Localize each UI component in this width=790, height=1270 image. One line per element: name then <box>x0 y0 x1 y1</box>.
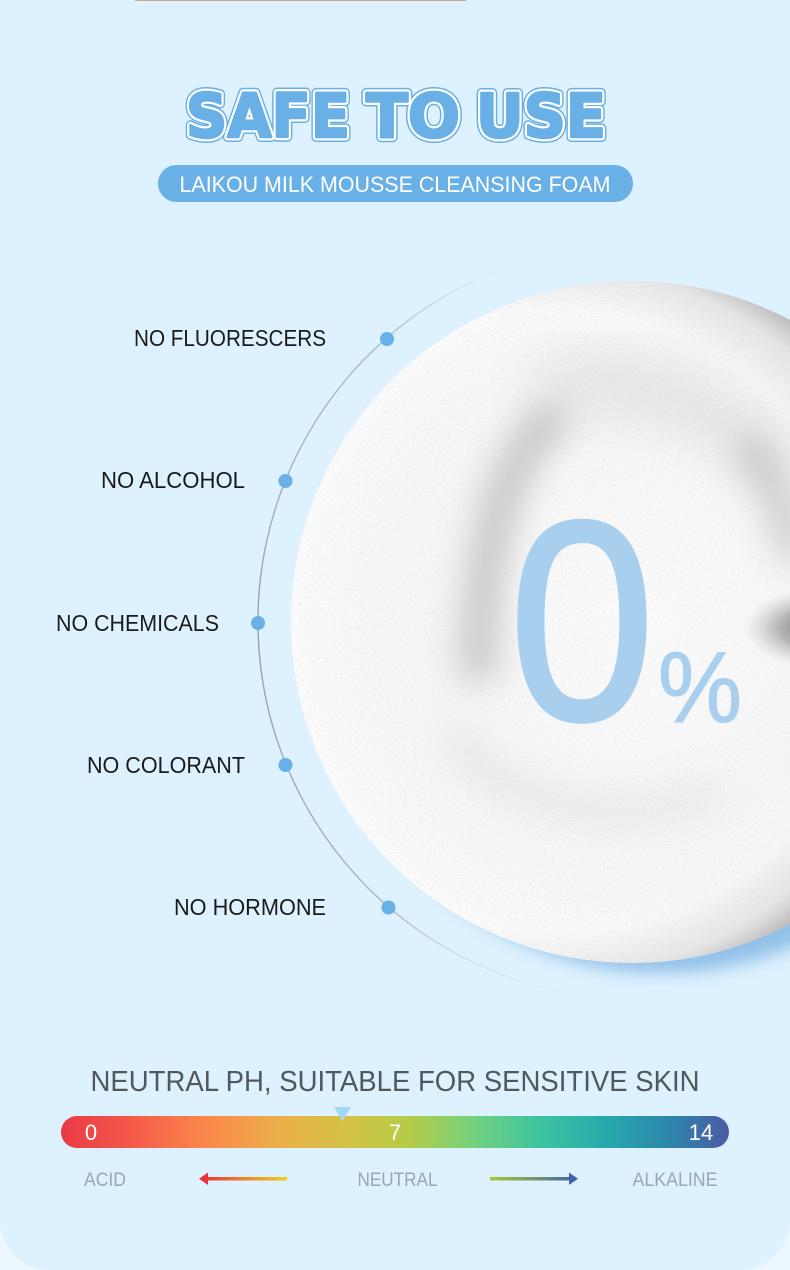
title: SAFE TO USE: USE <box>476 81 606 152</box>
title: SAFE TO USE: USE <box>476 81 606 152</box>
subtitle pill <box>158 165 633 202</box>
title: SAFE TO USE: TO <box>366 81 460 152</box>
pH scale bar: 0 <box>85 1120 97 1145</box>
arrow: toward acid <box>199 1172 287 1185</box>
title: SAFE TO USE <box>186 81 606 152</box>
label: acid: ACID <box>84 1170 126 1191</box>
arrow: toward alkaline <box>490 1172 578 1185</box>
title: SAFE TO USE: TO <box>366 81 460 152</box>
feature: no chemicals: NO CHEMICALS <box>56 610 219 636</box>
title: SAFE TO USE: USE <box>476 81 606 152</box>
title: SAFE TO USE: SAFE <box>186 81 350 152</box>
percent sign: % <box>658 632 742 744</box>
pH scale bar <box>61 1107 729 1148</box>
label: neutral: NEUTRAL <box>358 1170 438 1191</box>
top strip of previous section <box>135 0 466 1</box>
label: alkaline: ALKALINE <box>632 1170 718 1191</box>
pH marker <box>334 1107 351 1121</box>
subtitle pill: LAIKOU MILK MOUSSE CLEANSING FOAM <box>180 172 610 197</box>
pH scale bar: 7 <box>389 1120 401 1145</box>
decorative arc line <box>258 266 590 996</box>
title: SAFE TO USE: TO <box>366 81 460 152</box>
foam circle with 0% <box>280 270 790 970</box>
feature: no alcohol: NO ALCOHOL <box>101 467 245 493</box>
feature: no fluorescers: NO FLUORESCERS <box>134 325 326 351</box>
title: SAFE TO USE: SAFE <box>186 81 350 152</box>
feature: no hormone: NO HORMONE <box>174 894 326 920</box>
big zero: 0 <box>509 463 655 780</box>
foam shadow <box>448 910 790 982</box>
title: SAFE TO USE: SAFE <box>186 81 350 152</box>
pH scale bar: 14 <box>689 1120 713 1145</box>
feature: no colorant: NO COLORANT <box>87 752 245 778</box>
pH heading: NEUTRAL PH, SUITABLE FOR SENSITIVE SKIN <box>90 1066 700 1098</box>
